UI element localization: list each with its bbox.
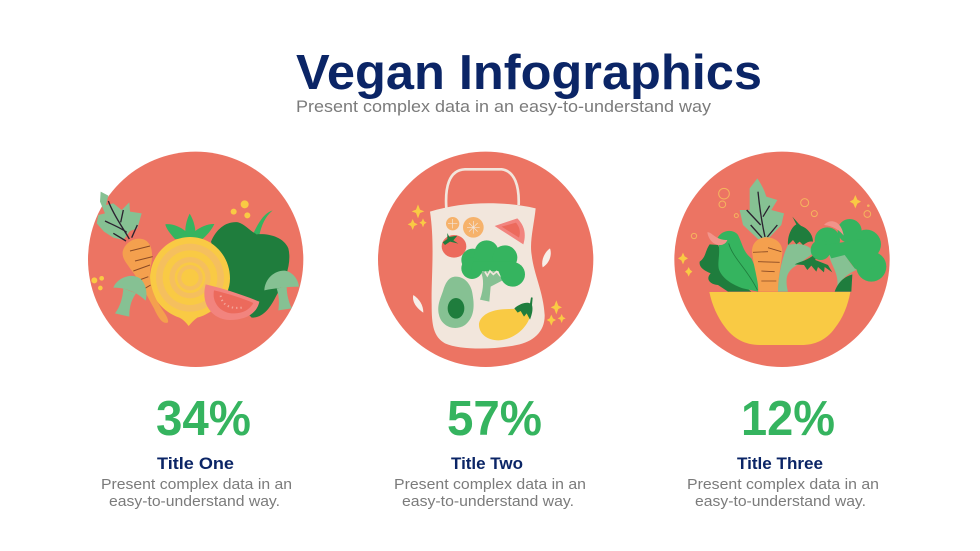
icon: broccoli: [811, 219, 886, 292]
icon: tote bag: [430, 169, 545, 349]
icon: sparkles: [408, 204, 566, 326]
icon: carrot: [740, 178, 784, 292]
icon: yellow dots: [91, 200, 250, 290]
percentage: 57%: [447, 392, 542, 446]
panel: stat three: [687, 392, 879, 510]
description: Present complex data in an: [101, 476, 292, 493]
heading: Title One: [157, 454, 234, 473]
icon: tomato slice: [495, 218, 525, 244]
icon: avocado: [438, 277, 474, 328]
icon: mushroom right: [264, 271, 299, 310]
icon: mushroom left: [113, 276, 146, 317]
title: Vegan Infographics: [296, 46, 762, 100]
icon: eggplant: [778, 217, 813, 292]
percentage: 34%: [156, 392, 251, 446]
panel: shopping bag circle: [378, 152, 593, 367]
icon: carrot: [97, 192, 168, 323]
percentage: 12%: [741, 392, 835, 446]
icon: tomato slice: [204, 284, 259, 320]
icon: beet leaves: [165, 214, 214, 240]
subtitle: Present complex data in an easy-to-understand way: [296, 97, 712, 116]
icon: bubbles: [691, 188, 871, 239]
description: easy-to-understand way.: [109, 493, 280, 510]
description: easy-to-understand way.: [695, 493, 866, 510]
icon: white leaves: [542, 248, 551, 267]
panel: stat two: [394, 392, 586, 510]
description: easy-to-understand way.: [402, 493, 574, 510]
icon: radish slice: [707, 232, 727, 245]
icon: orange slices: [446, 217, 484, 238]
icon: green lettuce: [717, 231, 758, 292]
heading: Title Two: [451, 454, 523, 473]
icon: eggplant: [479, 297, 533, 340]
panel: stat one: [101, 392, 292, 510]
heading: Title Three: [737, 454, 823, 473]
icon: bell pepper: [211, 210, 289, 318]
description: Present complex data in an: [394, 476, 586, 493]
icon: sparkles: [678, 195, 861, 277]
panel: vegetables circle: [88, 152, 303, 367]
icon: bowl: [709, 292, 850, 345]
icon: sliced beet: [150, 237, 230, 326]
icon: tomato: [787, 252, 834, 292]
panel: salad bowl circle: [674, 152, 890, 367]
icon: broccoli: [461, 240, 525, 302]
icon: dark lettuce: [700, 244, 751, 292]
description: Present complex data in an: [687, 476, 879, 493]
icon: tomato: [442, 233, 466, 258]
